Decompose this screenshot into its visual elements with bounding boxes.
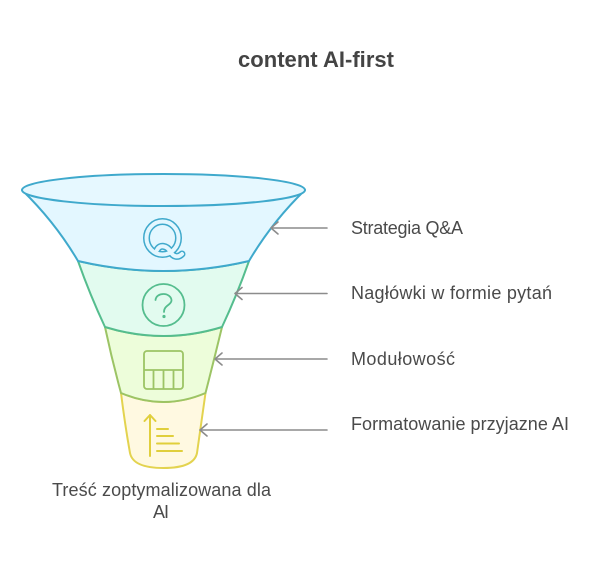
title: content AI-first — [238, 47, 395, 72]
funnel segment: blue — [22, 190, 305, 271]
caption: Treść zoptymalizowana dla — [52, 480, 272, 500]
caption — [52, 480, 272, 522]
arrow: Modułowość — [215, 353, 327, 365]
label: Formatowanie przyjazne AI: Formatowanie przyjazne AI — [351, 414, 569, 434]
funnel segment: yellow — [121, 393, 206, 468]
label: Strategia Q&A: Strategia Q&A — [351, 218, 463, 238]
label: Nagłówki w formie pytań: Nagłówki w formie pytań — [351, 283, 552, 303]
arrow: Nagłówki w formie pytań — [235, 288, 327, 300]
icon: sorted list with up arrow — [144, 415, 182, 456]
caption: AI — [153, 502, 169, 522]
label: Modułowość: Modułowość — [351, 349, 455, 369]
icon: question mark in circle — [142, 284, 184, 326]
funnel segment: green — [78, 261, 249, 336]
funnel — [22, 174, 305, 468]
funnel segment: lime — [105, 327, 222, 402]
arrow: Strategia Q&A — [271, 222, 327, 234]
funnel top ellipse — [22, 174, 305, 206]
icon: letter Q — [146, 222, 182, 256]
arrow: Formatowanie przyjazne AI — [200, 424, 327, 436]
icon: module grid — [144, 351, 183, 389]
